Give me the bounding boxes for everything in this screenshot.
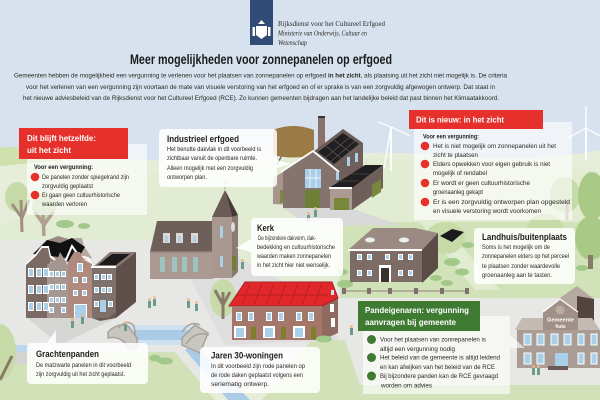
trees left	[0, 182, 173, 380]
panel: industrieel erfgoed: zichtbaar vanuit de openbare ruimte.	[167, 155, 257, 162]
bridges	[108, 321, 209, 353]
title: Meer mogelijkheden voor zonnepanelen op erfgoed	[130, 52, 392, 67]
header logo	[250, 0, 273, 45]
panel: grachtenpanden: Grachtenpanden	[36, 349, 99, 359]
panel: dit is nieuw: Voor een vergunning:	[423, 134, 479, 140]
fence	[342, 288, 469, 294]
panel: jaren 30 woningen: Jaren 30-woningen	[211, 350, 283, 360]
panel: grachtenpanden	[27, 330, 148, 384]
intro text	[14, 72, 507, 102]
logo text	[277, 20, 385, 47]
panel: dit blijft hetzelfde: uit het zicht	[27, 145, 71, 155]
panel: dit blijft hetzelfde	[19, 128, 147, 215]
panel: kerk: De bijzondere dakvorm, dak-	[258, 235, 316, 242]
panel: grachtenpanden: De matzwarte panelen in dit voorbeeld	[36, 362, 131, 369]
panel: landhuis buitenplaats: groenaanleg aan te tasten.	[482, 272, 552, 279]
panel: dit blijft hetzelfde: De panelen zonder spiegelrand zijn	[42, 174, 129, 181]
panel: landhuis buitenplaats: Soms is het mogelijk om de	[482, 244, 550, 251]
town hall: gemeentehuis: Gemeente	[547, 318, 574, 324]
logo text: Wetenschap	[278, 39, 307, 47]
panel: dit blijft hetzelfde: Dit blijft hetzelfde:	[27, 133, 96, 143]
panel: industrieel erfgoed: ontworpen plan.	[167, 174, 207, 181]
panel: grachtenpanden: zijn zorgvuldig uit het zicht geplaatst.	[36, 371, 125, 378]
panel: dit blijft hetzelfde: Er gaan geen cultuurhistorische	[42, 192, 120, 199]
panel: jaren 30 woningen: de rode daken geplaatst volgens een	[211, 372, 303, 379]
panel: pandeigenaren: aanvragen bij gemeente	[365, 317, 456, 327]
panel: dit is nieuw: groenaanleg gekapt	[433, 189, 483, 196]
panel: dit is nieuw: Het is niet mogelijk om zonnepanelen uit het	[433, 143, 556, 150]
panel: dit is nieuw: zicht te plaatsen	[433, 152, 478, 159]
logo text: Ministerie van Onderwijs, Cultuur en	[277, 30, 367, 38]
panel: kerk: bedekking en cultuurhistorische	[257, 244, 335, 251]
panel: dit is nieuw	[409, 110, 572, 220]
panel: industrieel erfgoed: Het benutte dakvlak in dit voorbeeld is	[167, 146, 261, 153]
country house: landhuis	[348, 228, 464, 283]
intro text: voor het verlenen van een vergunning zijn voortaan de mate van visuele verstoring van het erfgoed en of er sprake is van een zorgvuldig afgewogen ontwerp. Dat staat in	[26, 84, 495, 91]
trees right	[337, 172, 600, 288]
panel: pandeigenaren: Pandeigenaren: vergunning	[365, 305, 469, 315]
panel: pandeigenaren: Voor het plaatsen van zonnepanelen is	[380, 336, 486, 344]
panel: pandeigenaren: Het beleid van de gemeente is altijd leidend	[380, 354, 500, 362]
panel: kerk: waarden maken zonnepanelen	[256, 253, 331, 260]
panel: pandeigenaren: Bij bijzondere panden kan de RCE gevraagd	[380, 373, 498, 380]
panel: kerk: Kerk	[257, 223, 274, 233]
panel: kerk: in het zicht hier niet wenselijk.	[257, 262, 330, 269]
panel: jaren 30 woningen: In dit voorbeeld zijn rode panelen op	[211, 363, 305, 370]
panel: landhuis buitenplaats: te plaatsen zonder waardevolle	[482, 263, 560, 270]
panel: dit is nieuw: Er is een zorgvuldig ontworpen plan opgesteld	[433, 199, 570, 206]
intro text: Gemeenten hebben de mogelijkheid een vergunning te verlenen voor het plaatsen van zonnepanelen op erfgoed in het zicht, als plaatsing uit het zicht niet mogelijk is. De criteria	[14, 72, 507, 80]
panel: dit is nieuw: Er wordt er geen cultuurhistorische	[433, 180, 530, 187]
panel: jaren 30 woningen	[200, 347, 320, 393]
town hall: gemeentehuis: huis	[555, 324, 566, 330]
canal houses: grachtenpanden	[26, 236, 198, 328]
factory: industrieel erfgoed	[273, 116, 383, 222]
panel: pandeigenaren: worden om advies	[380, 382, 432, 390]
panel: dit is nieuw: mogelijk of rendabel	[433, 170, 487, 177]
panel: landhuis buitenplaats	[474, 228, 575, 284]
panel: industrieel erfgoed: Alleen mogelijk met een zorgvuldig	[167, 165, 253, 172]
panel: dit is nieuw: Elders opwekken voor eigen gebruik is niet	[433, 161, 550, 168]
panel: jaren 30 woningen: seriematig ontwerp.	[211, 381, 269, 388]
panel: pandeigenaren: en kan afwijken van het beleid van de RCE	[380, 364, 495, 371]
red roof houses: jaren 30 woningen	[229, 282, 353, 342]
panel: pandeigenaren	[358, 301, 525, 394]
logo text: Rijksdienst voor het Cultureel Erfgoed	[278, 20, 385, 28]
panel: pandeigenaren: altijd een vergunning nodig	[380, 346, 455, 353]
panel: landhuis buitenplaats: Landhuis/buitenplaats	[482, 232, 567, 242]
panel: dit blijft hetzelfde: Voor een vergunning:	[34, 164, 93, 171]
panel: dit blijft hetzelfde: waarden verloren	[41, 201, 87, 208]
canal	[0, 325, 250, 400]
panel: dit blijft hetzelfde: zorgvuldig geplaatst	[42, 183, 93, 190]
panel: industrieel erfgoed: Industrieel erfgoed	[167, 134, 239, 144]
panel: industrieel erfgoed	[159, 129, 292, 187]
tree near houses	[210, 279, 236, 319]
panel: dit is nieuw: en visuele verstoring wordt voorkomen	[433, 208, 541, 215]
panel: kerk	[236, 218, 343, 276]
town hall: gemeentehuis	[515, 286, 600, 375]
panel: dit is nieuw: Dit is nieuw: in het zicht	[416, 114, 504, 124]
wind turbines	[378, 106, 600, 171]
church: kerk	[150, 180, 244, 279]
intro text: het nieuwe adviesbeleid van de Rijksdienst voor het Cultureel Erfgoed (RCE). Zo kunnen gemeenten bijdragen aan het landelijke beleid dat past binnen het Klimaatakkoord.	[23, 95, 499, 102]
panel: landhuis buitenplaats: zonnepanelen elders op het perceel	[482, 253, 569, 260]
